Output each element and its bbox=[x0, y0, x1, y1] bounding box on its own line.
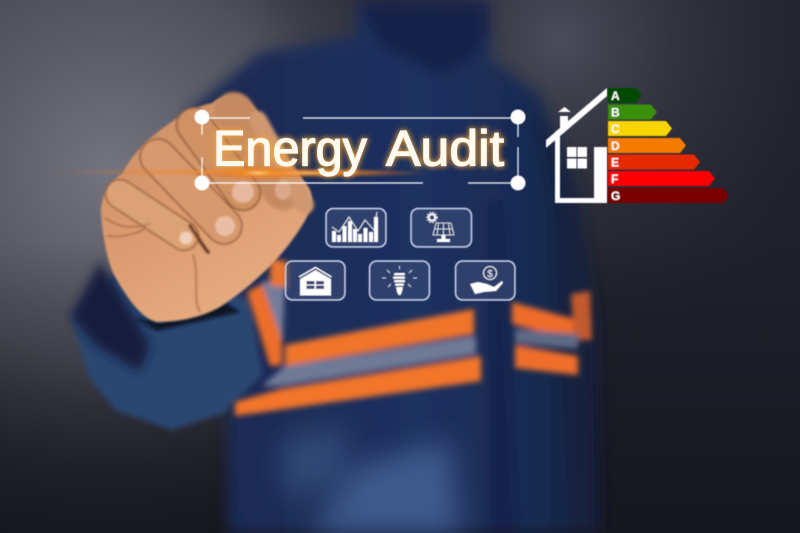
bar G: G bbox=[611, 189, 620, 203]
title frame with corner nodes bbox=[194, 110, 526, 190]
icon: light bulb button bbox=[370, 261, 430, 300]
icon: money in hand button bbox=[456, 261, 515, 300]
title: Energy Audit: Energy bbox=[213, 120, 367, 176]
energy rating bars A to G bbox=[608, 88, 729, 203]
title: Energy Audit bbox=[213, 120, 504, 176]
finger folds bbox=[234, 112, 305, 205]
energy rating house bbox=[546, 88, 607, 203]
bar A: A bbox=[611, 89, 620, 103]
reflective stripes bbox=[235, 258, 592, 416]
bar C: C bbox=[611, 122, 620, 136]
bar B: B bbox=[611, 106, 620, 120]
hand holding pen bbox=[101, 96, 312, 322]
worker jacket with reflective stripes bbox=[71, 0, 600, 533]
lens flare under title bbox=[50, 165, 430, 181]
icon: growth chart button bbox=[326, 208, 386, 247]
jacket body bbox=[150, 0, 600, 533]
title: Energy Audit: Energy bbox=[213, 120, 367, 176]
hand shape bbox=[101, 96, 312, 322]
fingernails bbox=[180, 180, 291, 244]
bar D: D bbox=[611, 139, 620, 153]
icon: money in hand button: $ bbox=[487, 269, 493, 280]
title: Energy Audit: Audit bbox=[386, 120, 504, 176]
bar F: F bbox=[611, 172, 618, 186]
lighter fabric folds bbox=[280, 425, 460, 533]
bar E: E bbox=[611, 156, 619, 170]
icon: solar panel button bbox=[411, 208, 472, 247]
icon: house button bbox=[286, 261, 345, 300]
sleeve cuff bbox=[71, 262, 262, 430]
title: Energy Audit: Audit bbox=[386, 120, 504, 176]
